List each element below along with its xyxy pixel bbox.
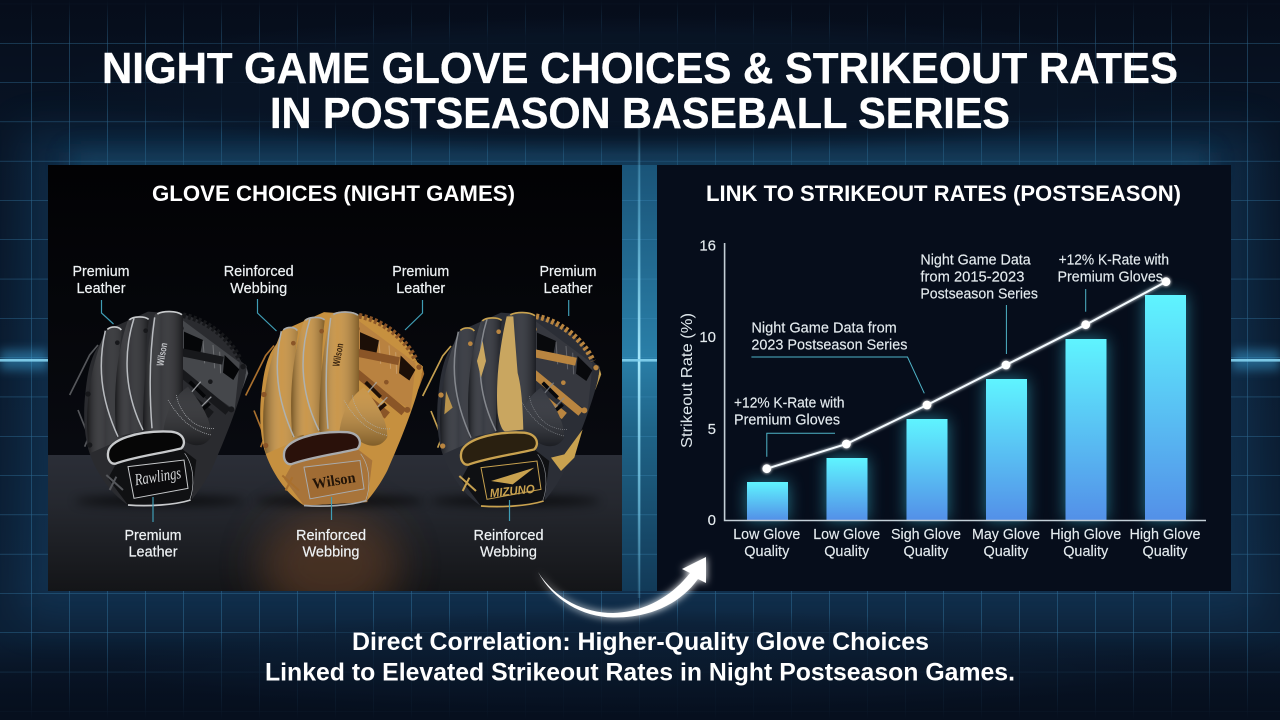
labels: top row callouts: Premium: [72, 263, 130, 280]
x axis labels: May Glove: [972, 526, 1040, 543]
labels: bottom row callouts: Reinforced: [474, 527, 544, 544]
y axis labels: 0: [708, 512, 716, 529]
annotation: 2023 data: 2023 Postseason Series: [751, 337, 907, 354]
y axis title: Strikeout Rate (%): [679, 313, 696, 448]
glove: tan Wilson: Wilson: [331, 343, 346, 368]
title: [102, 44, 1178, 138]
labels: bottom row callouts: [124, 497, 544, 560]
annotation: low end k-rate: [734, 395, 845, 457]
conclusion text: Linked to Elevated Strikeout Rates in Night Postseason Games.: [265, 658, 1015, 686]
x axis labels: [733, 526, 1200, 560]
title: IN POSTSEASON BASEBALL SERIES: [270, 89, 1010, 138]
labels: top row callouts: Premium: [392, 263, 449, 280]
y axis labels: 16: [699, 238, 716, 254]
conclusion text: Direct Correlation: Higher-Quality Glove Choices: [352, 628, 929, 656]
trend line with markers: [762, 277, 1170, 473]
title: NIGHT GAME GLOVE CHOICES & STRIKEOUT RATES: [102, 44, 1178, 93]
glove: black and gold Mizuno: [423, 312, 600, 507]
panel: link to strikeout rates: [657, 165, 1231, 591]
labels: top row callouts: Webbing: [230, 280, 287, 297]
glove: tan Wilson: Wilson: [311, 469, 357, 493]
x axis labels: Quality: [904, 543, 949, 560]
x axis labels: High Glove: [1130, 526, 1200, 543]
annotation: high end k-rate: Premium Gloves: [1058, 268, 1163, 285]
heading: glove choices: GLOVE CHOICES (NIGHT GAMES): [152, 181, 515, 206]
x axis labels: High Glove: [1050, 526, 1121, 543]
labels: top row callouts: Leather: [396, 280, 445, 297]
heading: strikeout rates: LINK TO STRIKEOUT RATES (POSTSEASON): [706, 181, 1181, 206]
y axis labels: 10: [699, 329, 716, 346]
x axis labels: Quality: [744, 543, 790, 560]
x axis labels: Quality: [824, 543, 870, 560]
labels: bottom row callouts: Premium: [124, 527, 182, 544]
arrow: gloves to strikeouts: [538, 557, 706, 618]
annotation: 2023 data: [751, 320, 924, 393]
x axis labels: Low Glove: [813, 526, 880, 543]
glove: tan Wilson: [246, 311, 423, 506]
annotation: low end k-rate: Premium Gloves: [734, 412, 840, 429]
annotation: high end k-rate: +12% K-Rate with: [1059, 251, 1169, 268]
axes: [725, 243, 1206, 520]
labels: bottom row callouts: Leather: [128, 544, 178, 560]
floor surface: [48, 455, 622, 591]
x axis labels: Quality: [1142, 543, 1188, 560]
labels: top row callouts: Leather: [544, 280, 593, 297]
x axis labels: Low Glove: [733, 526, 800, 543]
annotation: high end k-rate: [1058, 251, 1169, 312]
labels: bottom row callouts: Reinforced: [296, 527, 366, 544]
bar chart: [679, 238, 1206, 560]
annotation: low end k-rate: +12% K-Rate with: [734, 395, 845, 412]
glove: black Rawlings: [70, 311, 247, 506]
annotation: 2015-2023 data: Night Game Data: [920, 251, 1031, 268]
annotation: 2023 data: Night Game Data from: [751, 320, 897, 337]
labels: top row callouts: Reinforced: [224, 263, 294, 280]
annotation: 2015-2023 data: from 2015-2023: [920, 268, 1024, 285]
annotation: 2015-2023 data: Postseason Series: [920, 285, 1038, 302]
labels: bottom row callouts: Webbing: [302, 544, 360, 560]
x axis labels: Quality: [984, 543, 1029, 560]
labels: top row callouts: Leather: [76, 280, 126, 297]
annotation: 2015-2023 data: [920, 251, 1038, 354]
y axis labels: [699, 238, 716, 529]
glove: black Rawlings: Wilson: [155, 342, 170, 367]
labels: top row callouts: [72, 263, 596, 331]
conclusion text: [265, 628, 1015, 686]
x axis labels: Sigh Glove: [891, 526, 961, 543]
glove: black Rawlings: Rawlings: [133, 463, 182, 489]
panel: glove choices: [48, 165, 622, 620]
labels: top row callouts: Premium: [540, 263, 596, 280]
bars: [747, 295, 1186, 520]
y axis labels: 5: [708, 421, 716, 438]
x axis labels: Quality: [1063, 543, 1109, 560]
glove: black and gold Mizuno: MIZUNO: [489, 482, 536, 500]
labels: bottom row callouts: Webbing: [480, 544, 537, 560]
